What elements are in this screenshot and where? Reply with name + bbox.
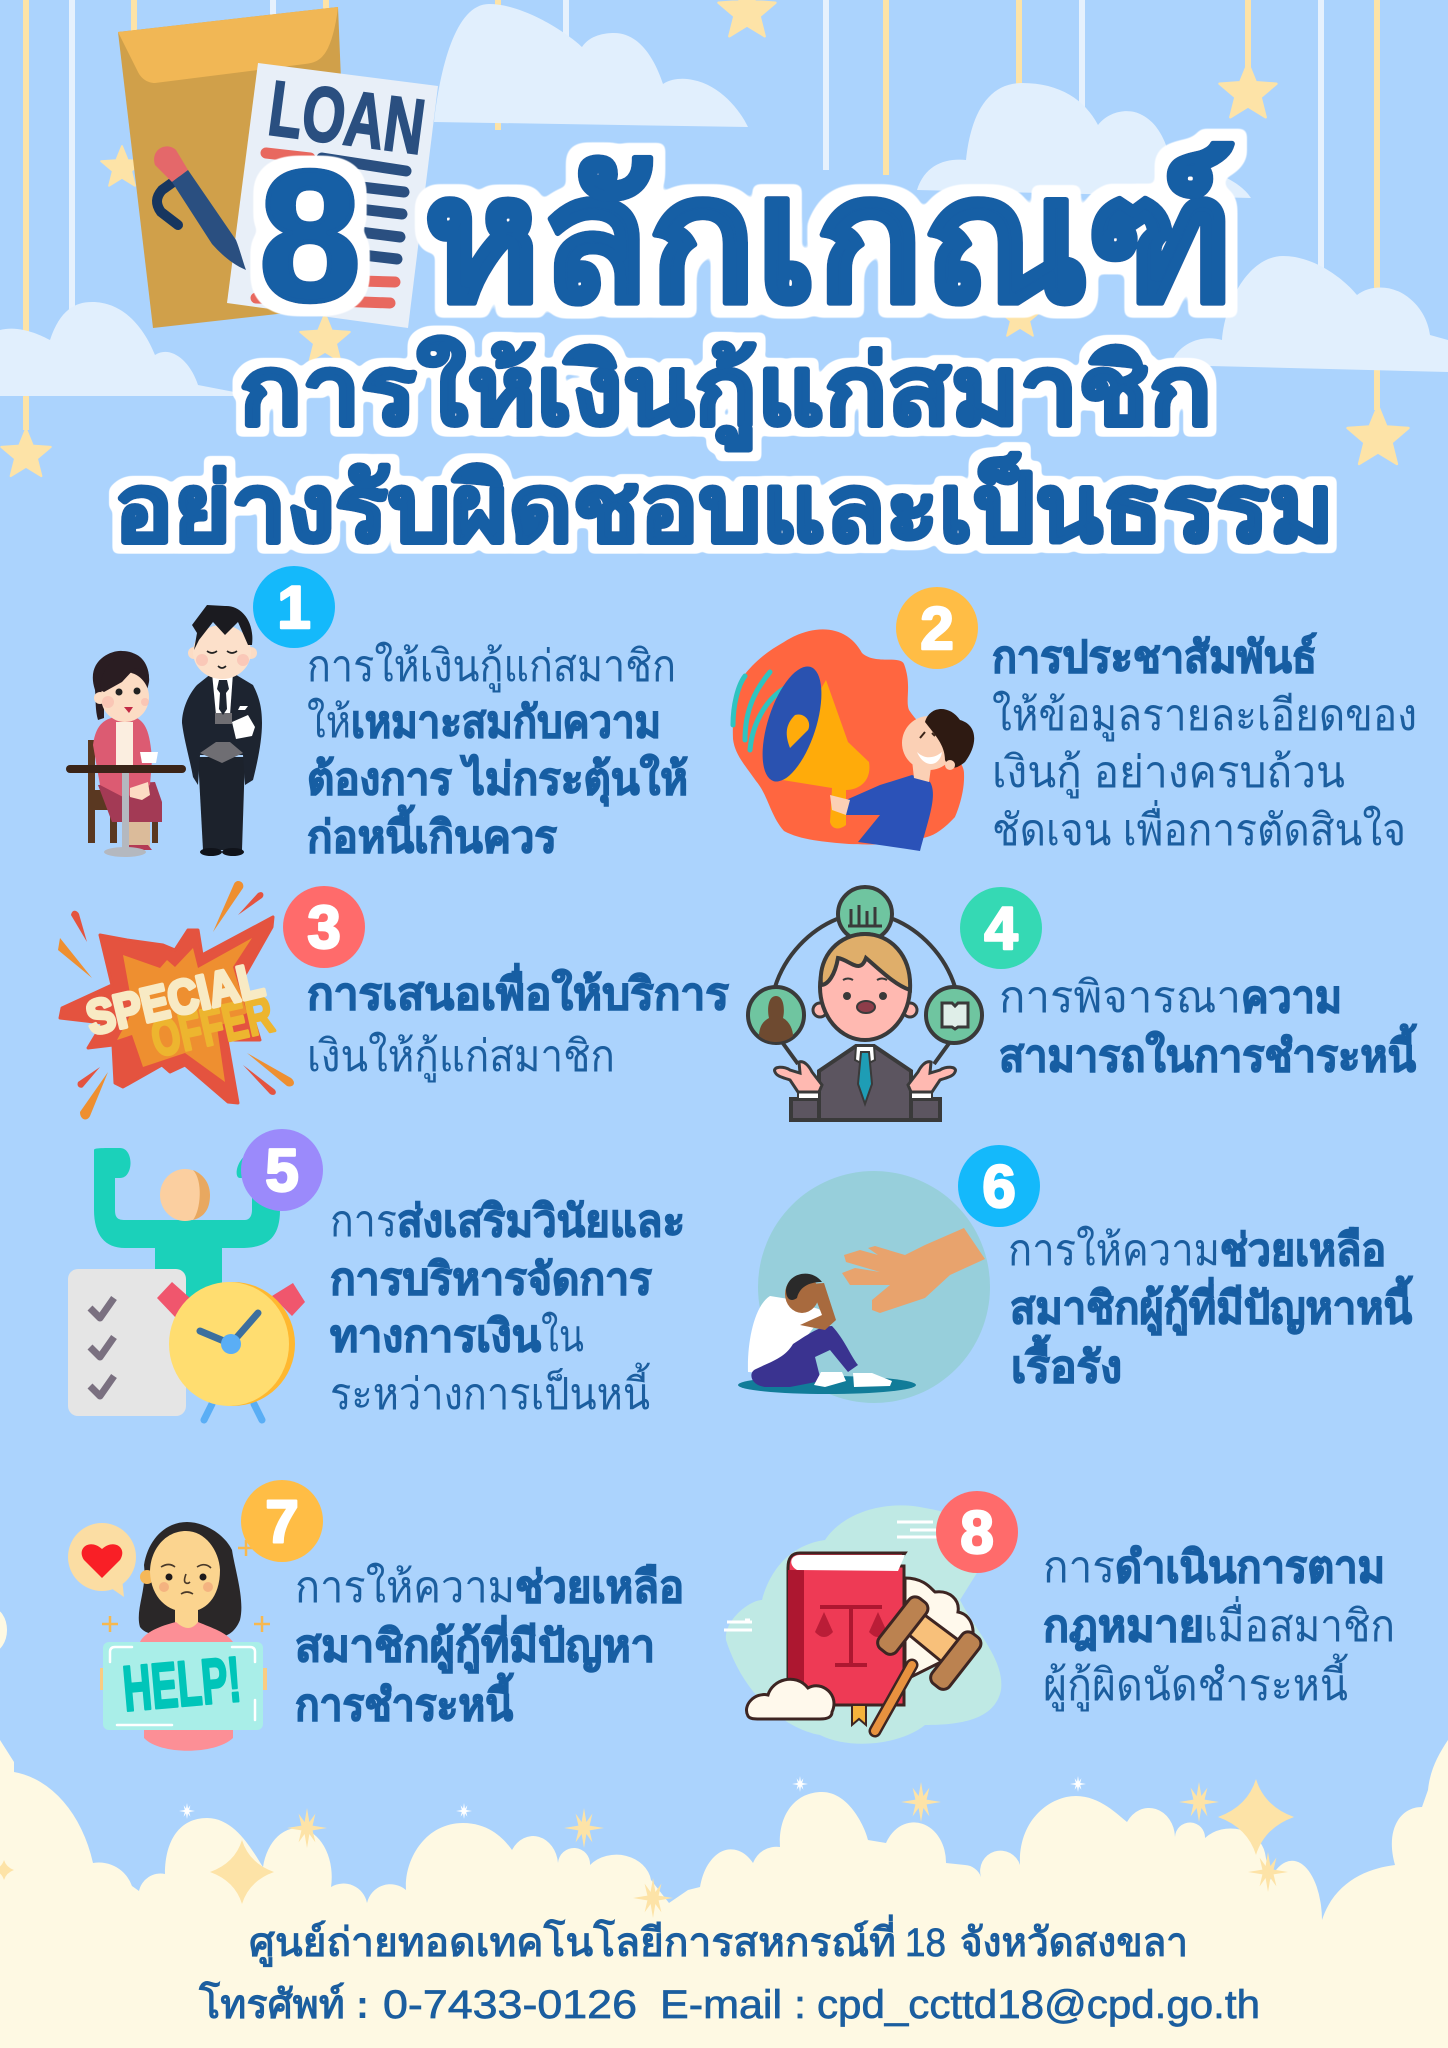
text 4	[999, 973, 1417, 1081]
icon: special offer burst: SPECIAL	[82, 954, 269, 1046]
footer contact line: E-mail :	[660, 1983, 806, 2027]
text 5	[330, 1197, 685, 1419]
text 8	[1043, 1543, 1395, 1712]
footer organisation name: ศูนย์ถ่ายทอดเทคโนโลยีการสหกรณ์ที่	[249, 1914, 896, 1967]
text 5: ส่งเสริมวินัยและ	[397, 1197, 685, 1246]
text 1: ก่อหนี้เกินควร	[307, 804, 557, 862]
text 7: สมาชิกผู้กู้ที่มีปัญหา	[295, 1615, 655, 1673]
text 1	[307, 641, 688, 862]
icon: man considering circles	[748, 887, 982, 1120]
badge 8	[936, 1491, 1018, 1573]
text 8: การ	[1043, 1543, 1115, 1592]
panel: criterion 5	[68, 1129, 685, 1420]
icon: special offer burst: OFFER	[146, 985, 279, 1069]
footer organisation name: 18	[905, 1921, 946, 1965]
icon: person with megaphone	[733, 629, 974, 851]
text 2	[992, 632, 1417, 855]
text 7: ช่วยเหลือ	[515, 1563, 684, 1612]
text 4: ความ	[1241, 973, 1342, 1022]
badge 7	[241, 1480, 323, 1562]
panel: criterion 2	[733, 587, 1417, 855]
text 1: ต้องการ ไม่กระตุ้นให้	[307, 753, 688, 807]
text 6: ช่วยเหลือ	[1220, 1226, 1386, 1275]
icon: teal figure, checklist and alarm clock	[68, 1148, 305, 1420]
title word: หลักเกณฑ์	[424, 143, 1234, 338]
text 2: เงินกู้ อย่างครบถ้วน	[992, 748, 1345, 799]
text 6	[1008, 1225, 1413, 1392]
footer contact line: cpd_ccttd18@cpd.go.th	[817, 1983, 1260, 2027]
text 1: ให้	[307, 697, 351, 747]
icon: law book, gavel and clouds	[724, 1505, 1001, 1744]
text 3	[307, 963, 729, 1083]
hanging strings and stars	[1, 0, 1408, 476]
text 7: การให้ความ	[295, 1562, 515, 1612]
footer contact line: 0-7433-0126	[383, 1983, 637, 2027]
loan envelope, paper and pen	[118, 7, 438, 328]
paper	[227, 63, 438, 328]
text 8: ผู้กู้ผิดนัดชำระหนี้	[1043, 1653, 1348, 1712]
text 7	[295, 1562, 684, 1730]
badge 1: 1	[277, 574, 311, 641]
badge 3	[283, 886, 365, 968]
panel: criterion 3	[58, 881, 729, 1119]
text 3: เงินให้กู้แก่สมาชิก	[307, 1031, 615, 1083]
text 5: การบริหารจัดการ	[330, 1255, 652, 1304]
panel: criterion 4	[748, 887, 1417, 1120]
badge 5	[241, 1129, 323, 1211]
icon: special offer burst	[58, 881, 294, 1119]
clouds behind the title	[0, 4, 1448, 396]
icon: girl holding help sign with heart bubble	[68, 1522, 270, 1751]
footer contact line	[198, 1981, 1260, 2027]
text 8: กฎหมาย	[1043, 1602, 1204, 1651]
text 5: ระหว่างการเป็นหนี้	[330, 1362, 650, 1419]
icon: woman at a table and bowing butler	[66, 605, 262, 857]
panel: criterion 6	[738, 1145, 1413, 1403]
paper: LOAN	[264, 64, 430, 171]
text 8: เมื่อสมาชิก	[1204, 1595, 1395, 1651]
title	[259, 133, 1234, 340]
text 2: ให้ข้อมูลรายละเอียดของ	[992, 690, 1417, 742]
text 6: สมาชิกผู้กู้ที่มีปัญหาหนี้	[1010, 1275, 1413, 1335]
title line 2: การให้เงินกู้แก่สมาชิก	[239, 336, 1212, 451]
text 7: การชำระหนี้	[295, 1672, 514, 1730]
text 2: การประชาสัมพันธ์	[992, 632, 1317, 682]
pen	[154, 146, 246, 270]
text 1: เหมาะสมกับความ	[351, 698, 661, 747]
badge 2	[896, 587, 978, 669]
panel: criterion 7	[68, 1480, 684, 1751]
badge 7: 7	[265, 1488, 299, 1555]
footer contact line: โทรศัพท์ :	[198, 1981, 369, 2027]
text 5: ใน	[541, 1311, 584, 1361]
badge 2: 2	[920, 595, 954, 662]
badge 8: 8	[960, 1499, 994, 1566]
text 2: ชัดเจน เพื่อการตัดสินใจ	[992, 799, 1406, 855]
text 4: การพิจารณา	[999, 973, 1241, 1022]
sparkles	[0, 1776, 1294, 1918]
panel: criterion 8	[724, 1491, 1395, 1744]
text 4: สามารถในการชำระหนี้	[999, 1023, 1417, 1081]
text 6: การให้ความ	[1008, 1225, 1220, 1275]
footer organisation name	[249, 1914, 1188, 1967]
text 3: การเสนอเพื่อให้บริการ	[307, 963, 729, 1019]
bottom cream clouds	[0, 1608, 1448, 2048]
badge 4	[960, 887, 1042, 969]
badge 4: 4	[984, 895, 1018, 962]
panel: criterion 1	[66, 566, 688, 862]
footer organisation name: จังหวัดสงขลา	[960, 1921, 1188, 1965]
icon: helping hand and distressed man	[738, 1171, 990, 1403]
badge 1	[253, 566, 335, 648]
envelope	[118, 7, 348, 328]
text 5: ทางการเงิน	[330, 1312, 541, 1361]
badge 6	[958, 1145, 1040, 1227]
text 6: เรื้อรัง	[1011, 1334, 1122, 1392]
badge 3: 3	[307, 894, 341, 961]
text 5: การ	[330, 1197, 397, 1246]
text 8: ดำเนินการตาม	[1115, 1543, 1385, 1592]
butler	[198, 757, 245, 850]
chair and legs	[88, 740, 158, 843]
badge 6: 6	[982, 1153, 1016, 1220]
title numeral 8: 8	[259, 133, 361, 340]
text 1: การให้เงินกู้แก่สมาชิก	[307, 641, 676, 693]
badge 5: 5	[265, 1137, 299, 1204]
icon: girl holding help sign with heart bubble: HELP!	[120, 1643, 244, 1725]
title line 3: อย่างรับผิดชอบและเป็นธรรม	[114, 451, 1334, 561]
